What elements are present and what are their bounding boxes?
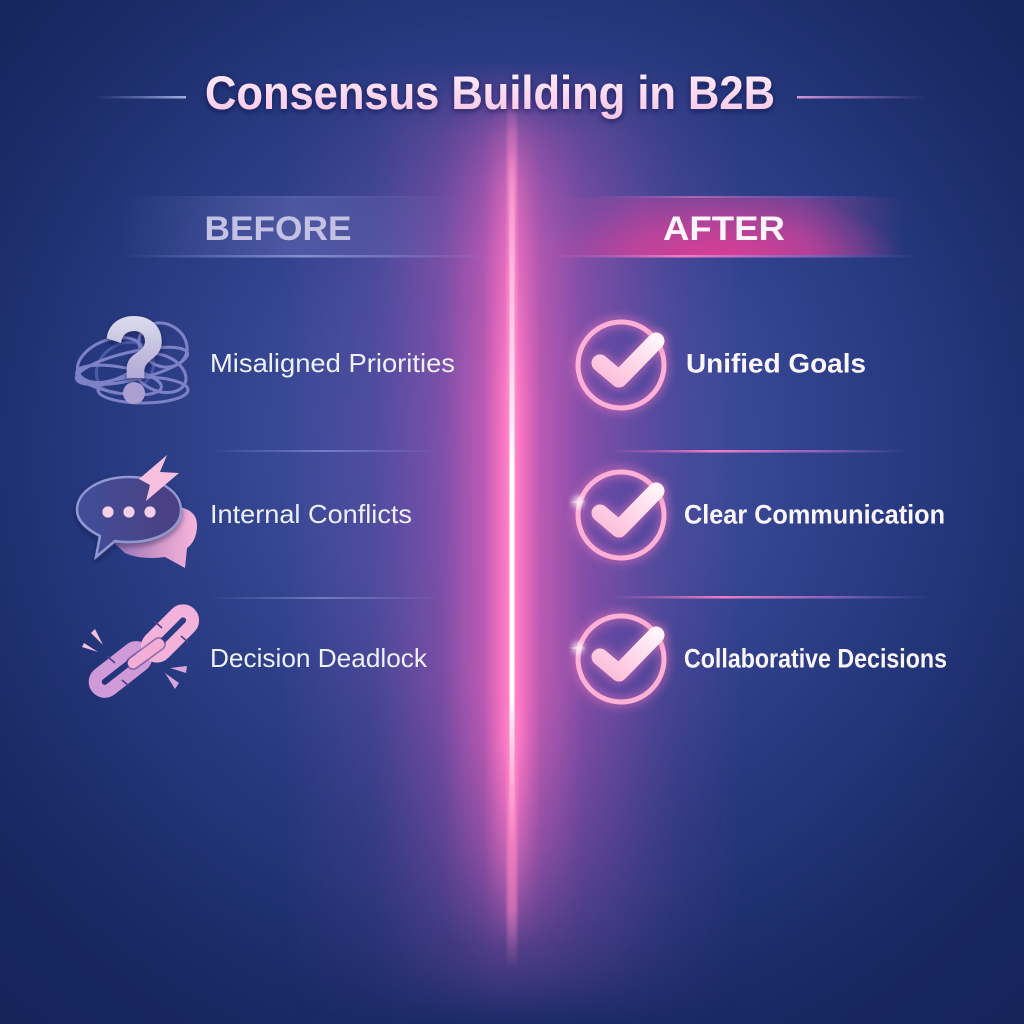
after label: AFTER [663, 210, 785, 248]
text: clear communication: Clear Communication [684, 500, 945, 530]
icon: broken chain [82, 607, 197, 695]
divider [210, 450, 440, 452]
icon: tangled question mark [71, 314, 195, 404]
central glowing divider [320, 68, 714, 1012]
after list [570, 322, 947, 702]
text: collaborative decisions: Collaborative Decisions [684, 644, 947, 674]
icon: check unified goals [578, 322, 664, 408]
text: internal conflicts: Internal Conflicts [210, 499, 412, 529]
panel: after header [545, 196, 920, 258]
panel: before header [120, 196, 490, 258]
before label: BEFORE [204, 210, 352, 248]
icon: check clear communication [570, 472, 664, 558]
text: misaligned priorities: Misaligned Priorities [210, 348, 455, 378]
title rule right [797, 96, 927, 98]
divider [610, 450, 910, 452]
title rule left [96, 96, 186, 98]
divider [210, 597, 440, 599]
before list [71, 314, 455, 695]
title text: Consensus Building in B2B [205, 66, 775, 119]
icon: conflict speech bubbles [77, 455, 197, 568]
text: decision deadlock: Decision Deadlock [210, 643, 428, 673]
text: unified goals: Unified Goals [686, 348, 866, 378]
divider [610, 596, 930, 598]
icon: check collaborative decisions [570, 616, 664, 702]
